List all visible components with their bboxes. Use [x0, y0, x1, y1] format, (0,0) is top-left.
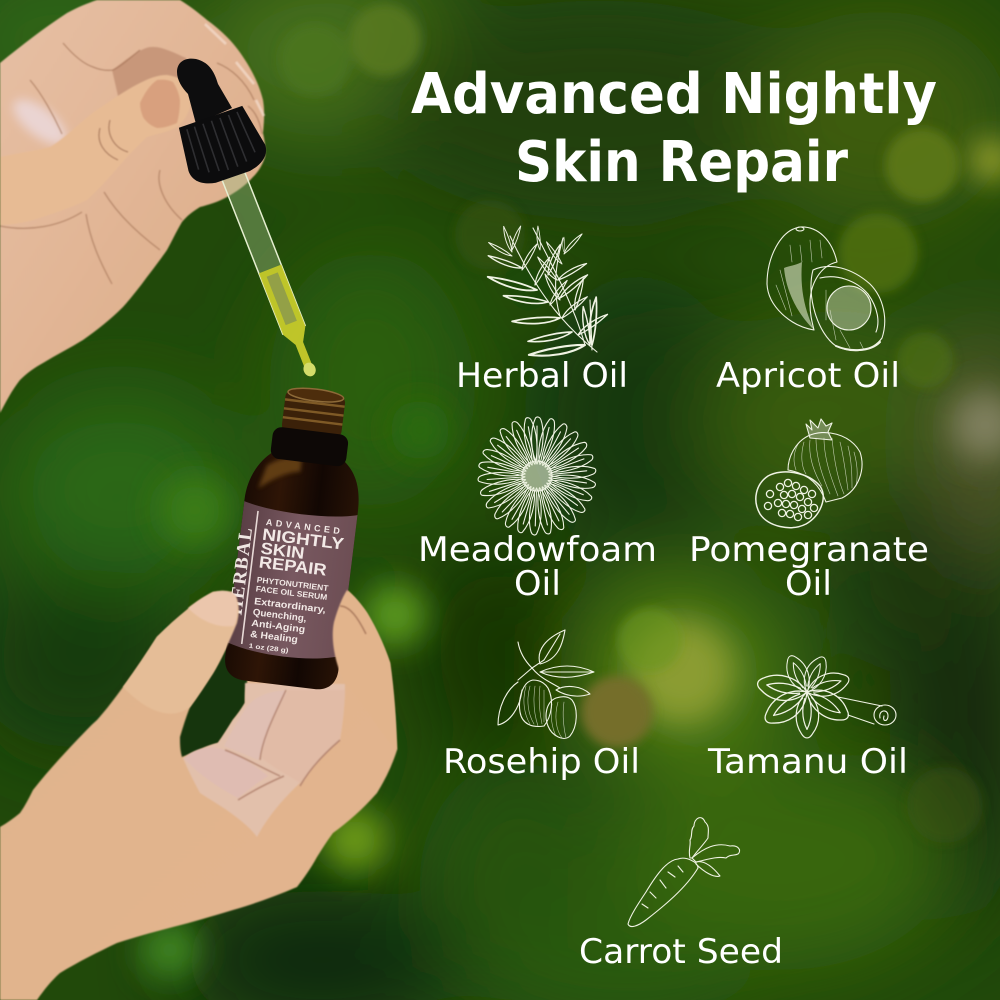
rubber bulb [177, 59, 232, 124]
photo: hand holding dropper [0, 0, 265, 413]
ribbed cap [174, 103, 272, 190]
icon: star anise and cinnamon [755, 652, 896, 738]
icon: rosemary sprig [487, 225, 608, 359]
index finger [333, 590, 397, 750]
ingredient: apricot oil [716, 227, 900, 396]
title: Advanced Nightly [411, 62, 937, 127]
label text: & Healing [249, 629, 299, 646]
thumb [123, 591, 239, 714]
hand creases [0, 43, 262, 284]
label: Herbal Oil [456, 356, 628, 396]
label: Pomegranate [689, 530, 929, 570]
photo: lower hand behind bottle [0, 590, 397, 1000]
dropper [174, 59, 323, 380]
thumbnail [188, 591, 237, 626]
icon: pomegranate [756, 419, 862, 528]
pit [827, 286, 871, 330]
thumb and index finger over bottle [123, 590, 397, 750]
icon: avocado halves [767, 227, 885, 351]
bottle body [223, 450, 364, 692]
gap between thumb and palm [180, 592, 252, 757]
thumb knuckle creases [99, 120, 128, 160]
palm highlight [6, 91, 74, 153]
shadow between fingers [112, 47, 190, 96]
label: Tamanu Oil [707, 742, 908, 782]
icon: carrot [628, 818, 740, 927]
icon: meadowfoam flower [478, 417, 596, 535]
glass pipette [221, 168, 323, 380]
label [221, 501, 357, 663]
label [418, 530, 657, 604]
shoulder highlight [258, 454, 302, 494]
label text: Extraordinary, [253, 596, 326, 616]
label text: ADVANCED [265, 517, 342, 536]
label [689, 530, 929, 604]
ingredient: herbal oil [456, 225, 628, 396]
label: Rosehip Oil [443, 742, 640, 782]
label: Apricot Oil [716, 356, 900, 396]
hand silhouette upper [0, 0, 265, 413]
fingernail edges [205, 24, 264, 116]
skin hatching [784, 262, 814, 330]
ingredient: tamanu oil [707, 652, 908, 782]
label: Meadowfoam [418, 530, 657, 570]
label text: HERBAL [225, 525, 257, 616]
label: Carrot Seed [579, 932, 783, 972]
title [411, 62, 937, 195]
ingredient: carrot seed [579, 818, 783, 972]
label text: REPAIR [258, 553, 328, 580]
label text: Anti-Aging [251, 618, 306, 636]
fingernail line [340, 606, 366, 634]
label text: NIGHTLY [261, 526, 345, 554]
label: Oil [514, 564, 561, 604]
ingredient: meadowfoam oil [418, 417, 657, 604]
bottle [218, 381, 372, 692]
thumbnail [140, 80, 180, 128]
label text: 1 oz (28 g) [248, 643, 289, 655]
title: Skin Repair [515, 130, 848, 195]
thumb [0, 75, 191, 225]
label text: SKIN [260, 540, 305, 563]
label text: PHYTONUTRIENT [256, 575, 329, 593]
label text: Quenching, [252, 607, 307, 625]
bottle neck threads [281, 385, 346, 438]
ingredient: rosehip oil [443, 630, 640, 782]
palm interior [183, 683, 345, 837]
label text: FACE OIL SERUM [255, 584, 328, 602]
ingredient: pomegranate oil [689, 419, 929, 604]
neck collar [270, 426, 349, 467]
label text [221, 513, 346, 660]
icon: rosehip branch [498, 630, 594, 738]
label: Oil [785, 564, 832, 604]
